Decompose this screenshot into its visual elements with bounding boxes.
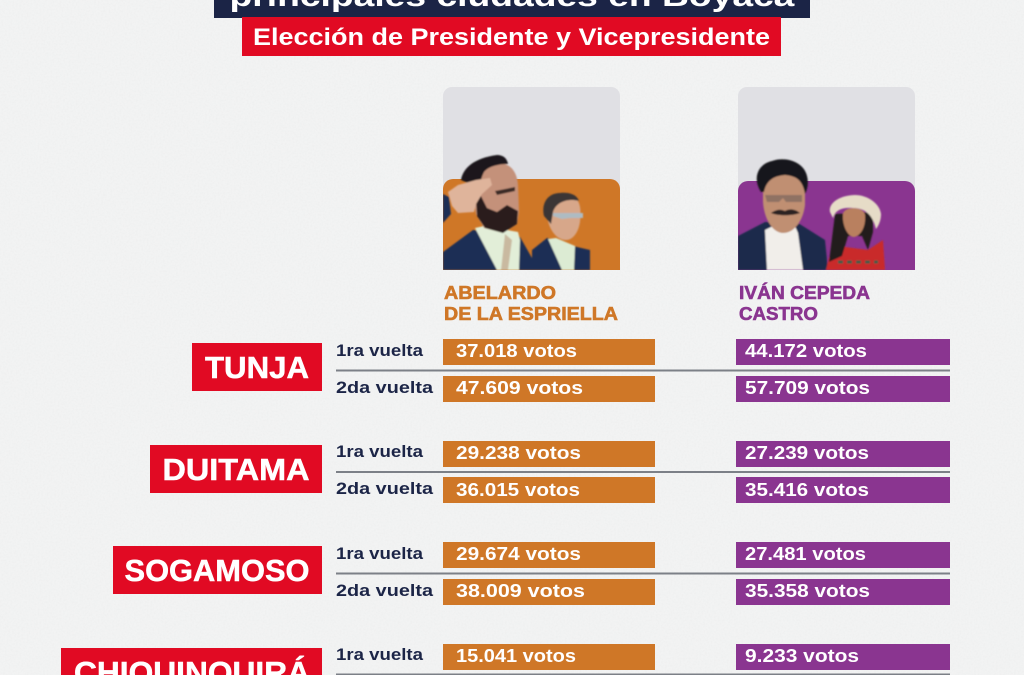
purple vote bars: 27.481 votos <box>745 543 866 564</box>
card grey background <box>738 87 915 270</box>
purple vote bars: 35.416 votos <box>745 479 869 500</box>
round labels: 2da vuelta <box>336 582 434 600</box>
round labels: 1ra vuelta <box>336 443 424 461</box>
orange vote bars: 37.018 votos <box>456 340 577 361</box>
round labels: 1ra vuelta <box>336 545 424 563</box>
purple vote bars: 35.358 votos <box>745 580 870 601</box>
round labels: 1ra vuelta <box>336 342 424 360</box>
card orange panel <box>443 179 620 270</box>
city label <box>192 343 322 391</box>
candidate name: IVÁN CEPEDA <box>739 282 870 303</box>
photo: presidential candidate and running mate <box>738 159 885 270</box>
card purple panel <box>738 181 915 270</box>
city label <box>150 445 322 493</box>
orange vote bars: 29.674 votos <box>456 543 581 564</box>
purple vote bar: 9.233 votos <box>745 645 859 666</box>
candidate card: Abelardo de la Espriella <box>443 87 620 324</box>
orange vote bars: 29.238 votos <box>456 442 581 463</box>
candidate name: ABELARDO <box>444 282 556 303</box>
title banner <box>214 0 810 18</box>
city label <box>61 648 322 675</box>
subtitle banner: Elección de Presidente y Vicepresidente <box>253 24 770 51</box>
results row: Duitama <box>150 441 950 503</box>
round labels: 2da vuelta <box>336 379 434 397</box>
city label: DUITAMA <box>162 452 310 487</box>
candidate card: Iván Cepeda Castro <box>738 87 915 324</box>
orange vote bar <box>443 644 655 670</box>
candidate name: CASTRO <box>739 303 818 324</box>
results row: Chiquinquirá <box>61 644 950 675</box>
purple vote bars: 44.172 votos <box>745 340 867 361</box>
results row: Tunja <box>192 339 950 402</box>
results row: Sogamoso <box>113 542 950 605</box>
city label: SOGAMOSO <box>124 553 310 588</box>
card grey background <box>443 87 620 270</box>
orange vote bars <box>443 339 655 402</box>
round label: 1ra vuelta <box>336 646 424 664</box>
orange vote bars <box>443 441 655 503</box>
purple vote bars: 27.239 votos <box>745 442 869 463</box>
purple vote bars <box>736 542 950 605</box>
orange vote bars <box>443 542 655 605</box>
orange vote bar: 15.041 votos <box>456 645 576 666</box>
city label <box>113 546 322 594</box>
orange vote bars: 47.609 votos <box>456 377 583 398</box>
city label: TUNJA <box>205 350 309 385</box>
purple vote bars: 57.709 votos <box>745 377 870 398</box>
photo: presidential candidate and running mate <box>443 155 590 270</box>
round labels: 2da vuelta <box>336 480 434 498</box>
subtitle banner <box>242 17 781 56</box>
purple vote bars <box>736 441 950 503</box>
purple vote bars <box>736 339 950 402</box>
candidate name: DE LA ESPRIELLA <box>444 303 618 324</box>
orange vote bars: 38.009 votos <box>456 580 585 601</box>
orange vote bars: 36.015 votos <box>456 479 580 500</box>
purple vote bar <box>736 644 950 670</box>
